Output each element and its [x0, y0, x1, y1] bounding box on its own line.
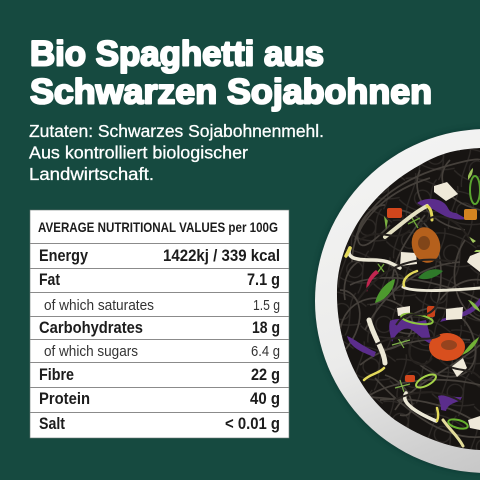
red onion [366, 270, 379, 292]
noodles [330, 140, 480, 460]
table header: AVERAGE NUTRITIONAL VALUES per 100G [38, 219, 278, 235]
table rows: Carbohydrates [39, 319, 143, 337]
toppings [346, 168, 480, 446]
tofu cubes [397, 182, 480, 430]
table rows: Protein [39, 390, 90, 408]
table rows: 22 g [251, 366, 280, 384]
ingredients text: Landwirtschaft. [29, 164, 154, 184]
table rows: Fibre [39, 366, 74, 384]
table rows: Salt [39, 415, 65, 433]
plate [314, 128, 480, 474]
green onions and herbs [375, 168, 480, 430]
orange mushroom and tomato [387, 208, 477, 382]
ingredients text [29, 121, 324, 184]
table rows: 7.1 g [247, 271, 280, 289]
table rows: < 0.01 g [225, 415, 280, 433]
table rows: 6.4 g [251, 344, 280, 360]
table rows: of which saturates [44, 298, 154, 314]
table rows: Energy [39, 247, 89, 265]
noodles over toppings [358, 217, 480, 402]
purple cabbage [347, 199, 480, 411]
table rows: of which sugars [44, 344, 138, 360]
table rows: Fat [39, 271, 60, 289]
title [30, 34, 432, 112]
table rows: 18 g [252, 319, 280, 337]
title: Schwarzen Sojabohnen [30, 72, 432, 112]
plate of black soybean spaghetti [314, 128, 480, 474]
bean sprouts [346, 206, 480, 446]
nutrition table [30, 210, 289, 438]
ingredients text: Aus kontrolliert biologischer [29, 142, 248, 162]
table rows [39, 247, 280, 433]
ingredients text: Zutaten: Schwarzes Sojabohnenmehl. [29, 121, 324, 141]
table rows: 40 g [250, 390, 280, 408]
table rows: 1.5 g [253, 298, 280, 314]
table rows: 1422kj / 339 kcal [163, 247, 280, 265]
title: Bio Spaghetti aus [30, 34, 324, 74]
table panel [30, 210, 289, 438]
